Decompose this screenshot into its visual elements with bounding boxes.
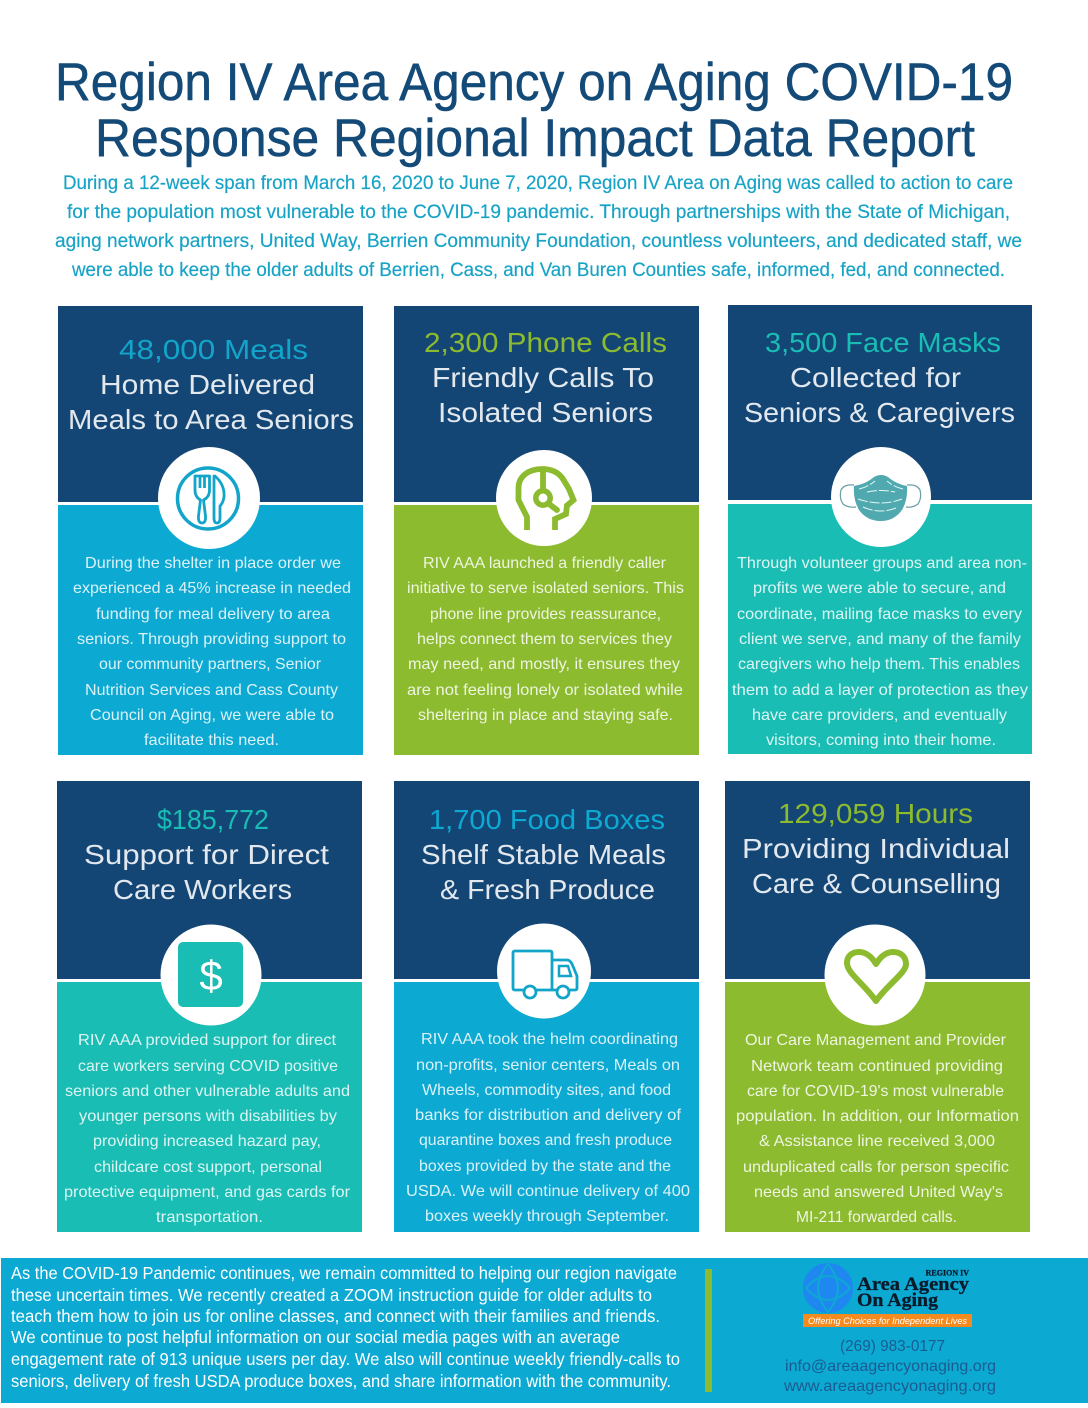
body text: face masks: profits we were able to secure, and	[753, 580, 1006, 597]
icon: delivery truck	[497, 924, 591, 1018]
panel: 129,059 hours	[725, 781, 1030, 1232]
heading: hours: 129,059 Hours	[778, 798, 973, 829]
logo: Area Agency on Aging: On Aging	[857, 1290, 939, 1311]
body text: hours: unduplicated calls for person specific	[743, 1159, 1009, 1176]
icon: heart	[824, 924, 926, 1026]
body text: hours: Our Care Management and Provider	[745, 1032, 1007, 1049]
heading: support: Support for Direct	[84, 839, 329, 870]
body text: food boxes: quarantine boxes and fresh produce	[419, 1132, 672, 1149]
body text: food boxes	[406, 1031, 690, 1225]
body text: hours: care for COVID-19's most vulnerable	[747, 1083, 1004, 1100]
body text: food boxes: banks for distribution and delivery of	[415, 1107, 682, 1124]
icon: head with headset	[496, 450, 592, 546]
intro text block	[55, 172, 1022, 281]
panel: $185,772 support	[57, 781, 362, 1232]
heading: meals: Home Delivered	[100, 369, 315, 400]
contact details: info@areaagencyonaging.org	[785, 1358, 996, 1375]
heading: hours	[742, 798, 1010, 899]
icon: plate with fork and knife	[158, 447, 260, 549]
body text: support: protective equipment, and gas cards for	[64, 1184, 351, 1201]
body text: phone calls: may need, and mostly, it ensures they	[408, 656, 680, 673]
heading: face masks: 3,500 Face Masks	[765, 327, 1001, 358]
logo: Area Agency on Aging: Offering Choices for Independent Lives	[808, 1316, 967, 1327]
icon: dollar square: $	[199, 952, 223, 999]
body text: phone calls	[407, 555, 684, 724]
body text: support: transportation.	[156, 1209, 263, 1226]
footer band	[1, 1258, 1088, 1403]
body text: face masks: client we serve, and many of the family	[739, 631, 1021, 648]
body text: meals: Nutrition Services and Cass County	[85, 682, 338, 699]
heading: meals: 48,000 Meals	[119, 334, 308, 365]
panel: 1,700 food boxes	[394, 781, 699, 1232]
heading: food boxes: 1,700 Food Boxes	[429, 804, 665, 835]
heading: phone calls	[424, 327, 667, 428]
body text: phone calls: phone line provides reassurance,	[430, 606, 661, 623]
icon: dollar square	[160, 924, 262, 1026]
body text: meals: facilitate this need.	[144, 732, 279, 749]
heading: face masks	[744, 327, 1015, 428]
heading: food boxes	[421, 804, 666, 905]
body text: support: providing increased hazard pay,	[93, 1133, 321, 1150]
contact details: (269) 983-0177	[840, 1338, 945, 1355]
body text: face masks: coordinate, mailing face masks to every	[737, 606, 1022, 623]
body text: food boxes: RIV AAA took the helm coordinating	[421, 1031, 678, 1048]
footer text block: engagement rate of 913 unique users per day. We also will continue weekly friendly-calls to	[11, 1349, 680, 1369]
body text: face masks: them to add a layer of protection as they	[732, 682, 1028, 699]
body text: food boxes: USDA. We will continue delivery of 400	[406, 1183, 690, 1200]
body text: face masks: visitors, coming into their home.	[766, 732, 996, 749]
body text: support: care workers serving COVID positive	[78, 1058, 338, 1075]
intro text block: aging network partners, United Way, Berrien Community Foundation, countless volunteers, and dedicated staff, we	[55, 230, 1022, 252]
body text: hours: MI-211 forwarded calls.	[796, 1209, 957, 1226]
body text: support: childcare cost support, personal	[94, 1159, 322, 1176]
body text: phone calls: RIV AAA launched a friendly caller	[423, 555, 667, 572]
title: Response Regional Impact Data Report	[95, 109, 975, 168]
title	[55, 53, 1013, 168]
body text: face masks: caregivers who help them. This enables	[738, 656, 1020, 673]
body text: face masks: Through volunteer groups and area non-	[737, 555, 1027, 572]
heading: phone calls: Isolated Seniors	[438, 397, 653, 428]
contact details: www.areaagencyonaging.org	[783, 1378, 996, 1395]
body text: support: RIV AAA provided support for direct	[78, 1032, 337, 1049]
heading: meals: Meals to Area Seniors	[68, 404, 354, 435]
contact details	[783, 1338, 996, 1395]
intro text block: for the population most vulnerable to the COVID-19 pandemic. Through partnerships with the State of Michigan,	[67, 201, 1010, 223]
logo: Area Agency on Aging: REGION IV	[926, 1268, 969, 1278]
body text: hours: Network team continued providing	[751, 1058, 1003, 1075]
body text: support	[64, 1032, 351, 1226]
panel: 48,000 meals	[58, 306, 363, 755]
panel: 2,300 phone calls	[394, 306, 699, 755]
intro text block: were able to keep the older adults of Berrien, Cass, and Van Buren Counties safe, informed, fed, and connected.	[71, 259, 1005, 281]
heading: hours: Providing Individual	[742, 833, 1010, 864]
body text: hours: population. In addition, our Information	[736, 1108, 1019, 1125]
footer text block: teach them how to join us for online classes, and connect with their families and friends.	[11, 1306, 660, 1326]
icon: face mask	[831, 447, 931, 547]
heading: face masks: Seniors & Caregivers	[744, 397, 1015, 428]
green divider bar	[705, 1269, 712, 1392]
heading: support: $185,772	[157, 804, 269, 835]
heading: support: Care Workers	[113, 874, 292, 905]
body text: phone calls: sheltering in place and staying safe.	[418, 707, 673, 724]
title: Region IV Area Agency on Aging COVID-19	[55, 53, 1013, 112]
body text: food boxes: boxes weekly through September.	[425, 1208, 669, 1225]
body text: meals: seniors. Through providing support to	[77, 631, 346, 648]
heading: face masks: Collected for	[790, 362, 961, 393]
body text: meals: funding for meal delivery to area	[96, 606, 330, 623]
logo: Area Agency on Aging	[803, 1263, 972, 1327]
footer text block: seniors, delivery of fresh USDA produce boxes, and share information with the community.	[11, 1371, 671, 1391]
footer text block: As the COVID-19 Pandemic continues, we remain committed to helping our region navigate	[11, 1263, 677, 1283]
body text: face masks: have care providers, and eventually	[752, 707, 1007, 724]
body text: hours: needs and answered United Way's	[754, 1184, 1003, 1201]
body text: meals: experienced a 45% increase in needed	[73, 580, 351, 597]
footer text block: We continue to post helpful information on our social media pages with an average	[11, 1327, 620, 1347]
heading: food boxes: & Fresh Produce	[440, 874, 655, 905]
body text: hours	[736, 1032, 1019, 1226]
body text: meals	[73, 555, 351, 749]
body text: hours: & Assistance line received 3,000	[759, 1133, 995, 1150]
heading: hours: Care & Counselling	[752, 868, 1001, 899]
heading: phone calls: 2,300 Phone Calls	[424, 327, 667, 358]
body text: phone calls: helps connect them to services they	[417, 631, 672, 648]
body text: food boxes: Wheels, commodity sites, and food	[422, 1082, 671, 1099]
panel: 3,500 face masks	[728, 305, 1032, 754]
heading: phone calls: Friendly Calls To	[432, 362, 654, 393]
footer text block	[11, 1263, 680, 1391]
logo: Area Agency on Aging: Area Agency	[857, 1274, 970, 1295]
body text: phone calls: are not feeling lonely or isolated while	[407, 682, 683, 699]
body text: support: younger persons with disabilities by	[79, 1108, 337, 1125]
body text: food boxes: boxes provided by the state and the	[419, 1158, 671, 1175]
heading: food boxes: Shelf Stable Meals	[421, 839, 666, 870]
body text: support: seniors and other vulnerable adults and	[65, 1083, 350, 1100]
body text: meals: Council on Aging, we were able to	[90, 707, 334, 724]
footer text block: these uncertain times. We recently created a ZOOM instruction guide for older adults to	[11, 1285, 652, 1305]
body text: food boxes: non-profits, senior centers, Meals on	[416, 1057, 680, 1074]
body text: meals: During the shelter in place order we	[85, 555, 341, 572]
body text: meals: our community partners, Senior	[99, 656, 322, 673]
heading: meals	[68, 334, 354, 435]
heading: support	[84, 804, 329, 905]
body text: phone calls: initiative to serve isolated seniors. This	[407, 580, 684, 597]
body text: face masks	[732, 555, 1028, 749]
intro text block: During a 12-week span from March 16, 2020 to June 7, 2020, Region IV Area on Aging was called to action to care	[63, 172, 1013, 194]
